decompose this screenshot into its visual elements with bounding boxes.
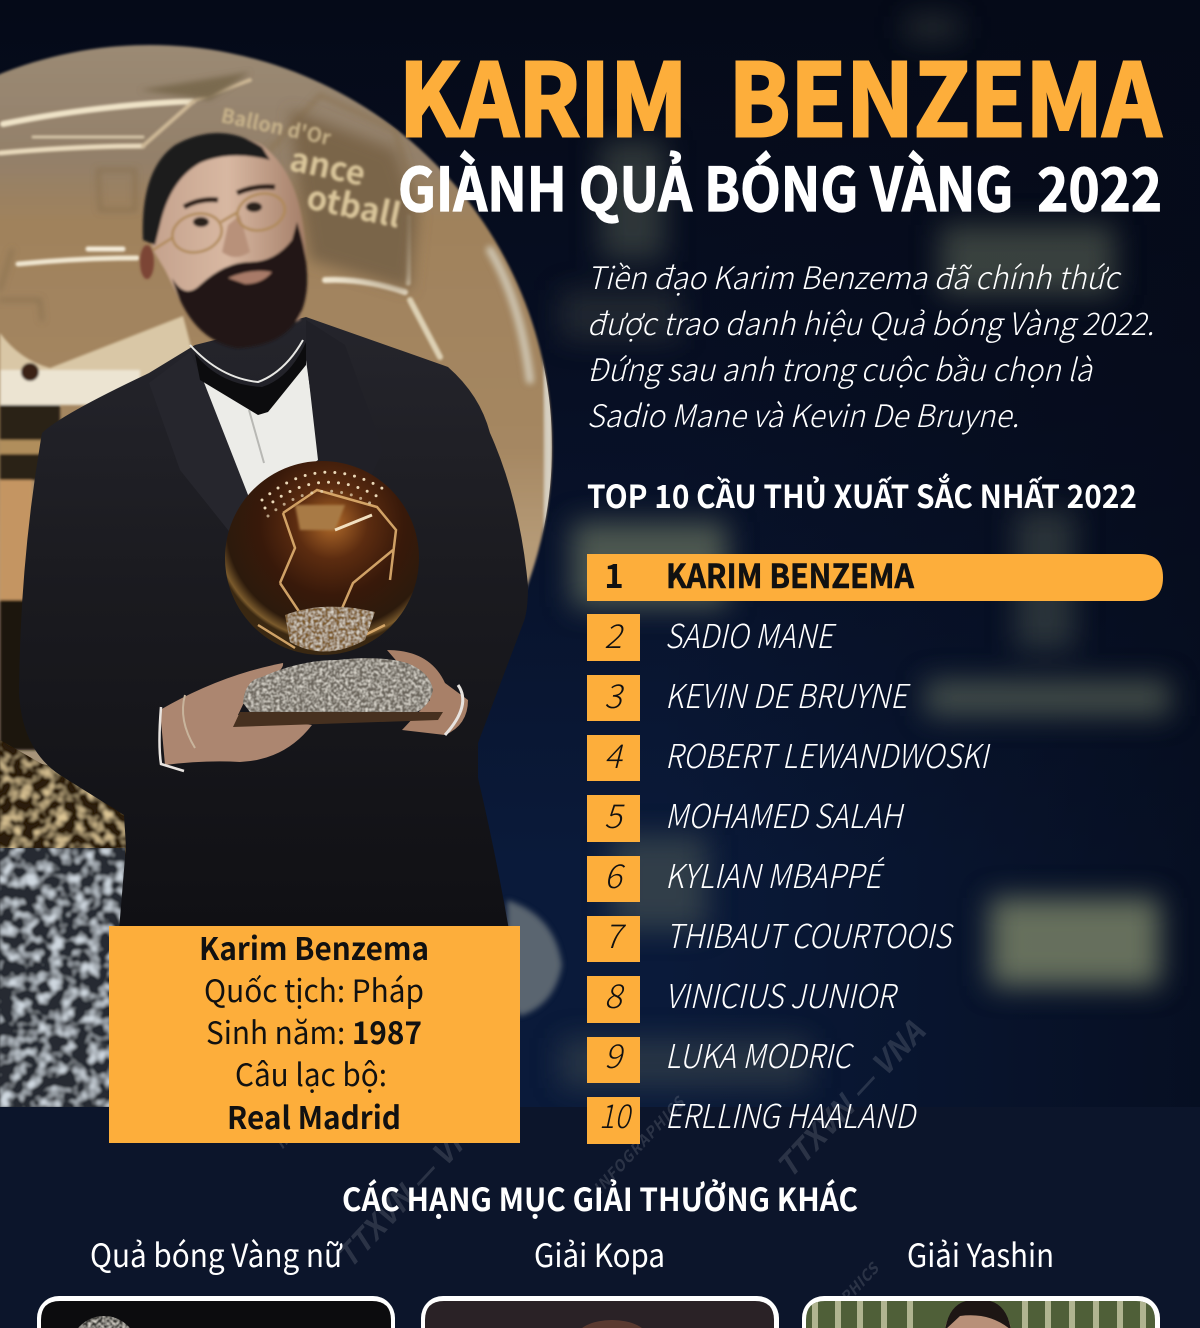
- other awards heading: CÁC HẠNG MỤC GIẢI THƯỞNG KHÁC: [342, 1175, 858, 1221]
- rank 2: SADIO MANE: [665, 610, 837, 658]
- rank 7: THIBAUT COURTOOIS: [666, 910, 954, 958]
- intro paragraph: Tiền đạo Karim Benzema đã chính thức: [587, 253, 1121, 298]
- shirt and lapels: [149, 320, 383, 535]
- player info box: Karim Benzema: [199, 924, 429, 969]
- rank 5: MOHAMED SALAH: [665, 790, 904, 838]
- rank 6: 6: [604, 850, 625, 898]
- rank 1 highlighted row: [587, 550, 1163, 601]
- shirt cuffs: [160, 685, 463, 771]
- rank 5: [587, 790, 904, 842]
- rank 9: LUKA MODRIC: [665, 1030, 855, 1078]
- portrait of Karim Benzema: [19, 133, 528, 930]
- award card: Yashin photo: [802, 1296, 1160, 1328]
- rank 1 highlighted row: KARIM BENZEMA: [666, 550, 915, 598]
- rank 3: [587, 670, 911, 721]
- watermarks: TTXVN — VNA: [324, 1099, 494, 1276]
- award label: Kopa: Giải Kopa: [534, 1231, 665, 1277]
- bottom band: [0, 1107, 1200, 1328]
- intro paragraph: được trao danh hiệu Quả bóng Vàng 2022.: [587, 299, 1154, 344]
- player info box: Real Madrid: [227, 1093, 401, 1138]
- rank 3: 3: [604, 670, 625, 718]
- left hand: [160, 663, 312, 765]
- rank 1 highlighted row: 1: [604, 550, 624, 598]
- glasses: [153, 188, 289, 258]
- golden ball backdrop photo: Ballon d'Or: [219, 100, 334, 151]
- golden ball backdrop photo: ance: [286, 133, 370, 196]
- intro paragraph: [587, 253, 1154, 436]
- ball seams and reflected ceiling lights: [0, 77, 552, 535]
- player info box: Quốc tịch: Pháp: [204, 966, 424, 1011]
- award card: women's ballon d'or photo: [37, 1296, 395, 1328]
- rank 9: 9: [604, 1030, 625, 1078]
- rank 10: 10: [599, 1090, 633, 1138]
- watermarks: TTXVN — VNA: [764, 1009, 934, 1186]
- rank 4: 4: [604, 730, 623, 778]
- golden ball backdrop photo: otball: [303, 171, 406, 237]
- rank 2: 2: [604, 610, 625, 658]
- jacket: [19, 317, 528, 930]
- rank 7: 7: [604, 910, 626, 958]
- rank 5: 5: [604, 790, 625, 838]
- watermarks: [270, 1009, 934, 1328]
- award label: Yashin: Giải Yashin: [907, 1231, 1054, 1277]
- player info box: Sinh năm: 1987: [206, 1008, 422, 1053]
- rank 10: [587, 1090, 918, 1144]
- rank 6: [587, 850, 885, 902]
- rank 8: 8: [604, 970, 625, 1018]
- sequin floor photo: [0, 740, 562, 1107]
- intro paragraph: Sadio Mane và Kevin De Bruyne.: [587, 391, 1019, 436]
- rank 3: KEVIN DE BRUYNE: [665, 670, 911, 718]
- rank 2: [587, 610, 837, 661]
- player info box: Câu lạc bộ:: [235, 1050, 387, 1095]
- rank 4: ROBERT LEWANDWOSKI: [665, 730, 991, 778]
- rank 8: [587, 970, 899, 1023]
- watermarks: INFOGRAPHICS: [270, 1054, 365, 1153]
- head: [140, 133, 307, 348]
- top 10 heading: TOP 10 CẦU THỦ XUẤT SẮC NHẤT 2022: [587, 472, 1137, 518]
- award card: Kopa photo: [421, 1296, 779, 1328]
- award label: women's ballon d'or: Quả bóng Vàng nữ: [90, 1231, 343, 1277]
- rank 10: ERLLING HAALAND: [665, 1090, 918, 1138]
- rank 9: [587, 1030, 855, 1083]
- player info box: [109, 924, 520, 1143]
- intro paragraph: Đứng sau anh trong cuộc bầu chọn là: [587, 345, 1093, 390]
- top 10 ranking list: [587, 550, 1163, 1144]
- trophy ball: [225, 461, 419, 655]
- rank 6: KYLIAN MBAPPÉ: [665, 850, 885, 898]
- trophy base: [233, 658, 443, 727]
- venue lower part: [0, 316, 200, 750]
- rank 7: [587, 910, 954, 962]
- rank 8: VINICIUS JUNIOR: [665, 970, 899, 1018]
- watermarks: INFOGRAPHICS: [588, 1091, 690, 1198]
- right hand: [387, 650, 468, 735]
- golden ball backdrop photo: [0, 45, 552, 849]
